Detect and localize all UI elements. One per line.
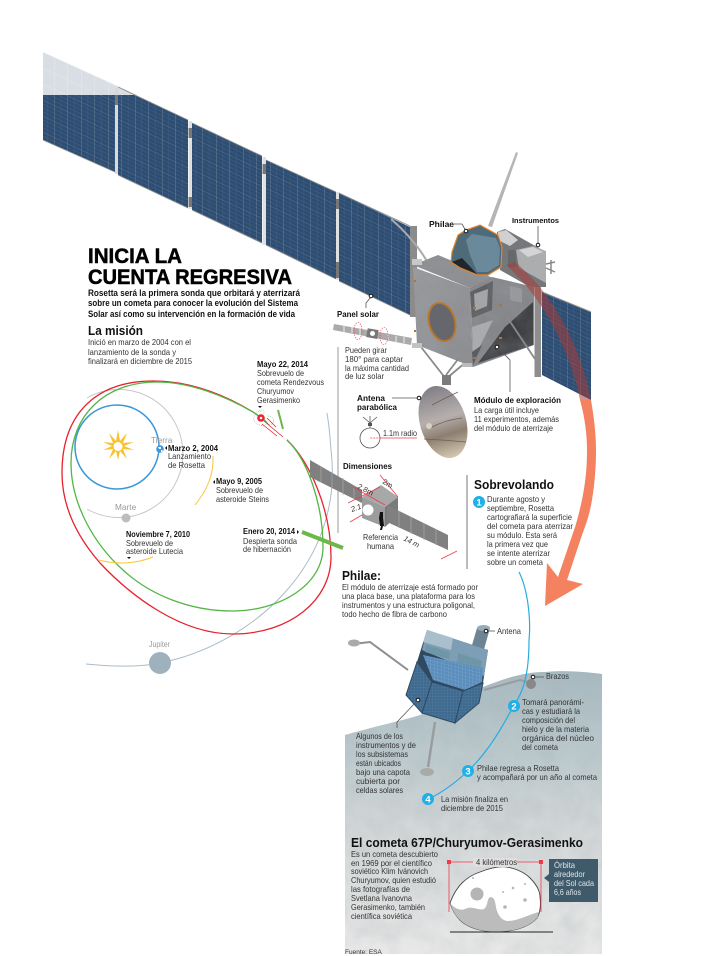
event Marzo 2, 2004: Marzo 2, 2004 (168, 444, 219, 453)
title: CUENTA REGRESIVA (88, 266, 292, 289)
comet section: Churyumov, quien estudió (351, 875, 436, 885)
antenna boom (488, 152, 518, 227)
Sobrevolando text: su módulo. Esta será (487, 530, 557, 540)
subtitle: Solar así como su intervención en la formación de vida (88, 309, 295, 319)
step 2: composición del (522, 715, 575, 725)
La misión: lanzamiento de la sonda y (88, 347, 177, 357)
cube (362, 485, 398, 507)
spacecraft body (412, 152, 555, 385)
lander legs (348, 640, 536, 776)
comet section: Es un cometa descubierto (351, 849, 438, 859)
label: Brazos: Brazos (546, 671, 569, 681)
comet section: Gerasimenko, también (351, 902, 425, 912)
label: Panel solar (333, 294, 412, 381)
event Noviembre 7, 2010 (126, 530, 190, 559)
lander antenna (470, 628, 490, 653)
label: Antena parabólica (357, 393, 421, 448)
label: Antena parabólica: parabólica (357, 402, 397, 412)
Sobrevolando text: se intente aterrizar (487, 548, 550, 558)
dark lower triangle (478, 302, 533, 363)
yellow arc Lutecia (99, 557, 153, 563)
subtitle: sobre un cometa para conocer la evolución del Sistema (88, 298, 298, 308)
Philae text: instrumentos y una estructura poligonal, (342, 600, 475, 610)
trajectory band over panel (506, 262, 591, 400)
event Mayo 9, 2005: Mayo 9, 2005 (216, 477, 263, 486)
orbit callout box: alrededor (554, 869, 585, 879)
label: Panel solar: Pueden girar (345, 345, 387, 355)
label: Antena: Antena (497, 626, 521, 636)
event Enero 20, 2014: Enero 20, 2014 (243, 527, 296, 536)
label: Panel solar: Panel solar (337, 309, 380, 319)
source note: Fuente: ESA (345, 949, 383, 956)
event Mayo 22, 2014: Gerasimenko (257, 395, 300, 405)
lower struts (421, 317, 535, 379)
large solar panel wing (43, 52, 428, 317)
note: instruments (356, 698, 420, 795)
comet shape diagram (447, 857, 553, 932)
comet surface panel (345, 671, 602, 954)
step 3: y acompañará por un año al cometa (477, 772, 597, 782)
subtitle (88, 288, 300, 319)
lander top cells (423, 655, 483, 690)
Mars (122, 514, 130, 522)
measure lines (348, 475, 457, 559)
Philae text (342, 568, 478, 619)
label: Antena parabólica: Antena (357, 393, 385, 403)
step 4: La misión finaliza en (441, 794, 508, 804)
comet section: en 1969 por el científico (351, 858, 432, 868)
porthole ring (424, 300, 460, 344)
event Mayo 22, 2014: cometa Rendezvous (257, 377, 324, 387)
measures: 14 m (402, 534, 421, 550)
label: Instrumentos: Instrumentos (512, 216, 559, 225)
note: instruments: bajo una capota (356, 767, 410, 777)
label: Módulo de exploración (474, 345, 561, 433)
label: Panel solar: la máxima cantidad (345, 363, 409, 373)
step 2: del cometa (522, 742, 558, 752)
lander solar panels (406, 662, 483, 723)
Sobrevolando text: cartografiará la superficie (487, 512, 572, 522)
dimensions diagram: Referencia (363, 532, 398, 542)
label: Panel solar: 180° para captar (345, 354, 403, 364)
divider Sobrevolando (466, 475, 468, 569)
Philae text: El módulo de aterrizaje está formado por (342, 582, 478, 592)
Rosetta orbit red (62, 381, 331, 634)
La misión (88, 323, 192, 366)
event Mayo 22, 2014: Sobrevuelo de (257, 368, 304, 378)
step 4 (422, 793, 508, 813)
Rosetta orbit green (71, 382, 323, 611)
lander top plate (422, 630, 488, 676)
orbit callout box: Órbita (554, 860, 575, 870)
comet section: científica soviética (351, 911, 412, 921)
step 2 (508, 697, 594, 752)
step 2: cas y estudiará la (522, 706, 580, 716)
label: Philae: Philae (429, 219, 454, 229)
dimensions diagram: Dimensiones (343, 461, 392, 471)
subtitle: Rosetta será la primera sonda que orbitará y aterrizará (88, 288, 300, 298)
event Enero 20, 2014: de hibernación (243, 544, 291, 554)
right face (470, 277, 534, 367)
label: Módulo de exploración: Módulo de exploración (474, 395, 561, 405)
right solar panel wing (534, 285, 591, 400)
left face (413, 267, 473, 367)
measures (349, 477, 421, 550)
measures: 2.8m (356, 482, 375, 498)
comet section (351, 835, 583, 921)
label: Módulo de exploración: 11 experimentos, además (474, 414, 559, 424)
blue trajectory line (428, 572, 530, 799)
left wing (310, 460, 362, 503)
Sobrevolando text: septiembre, Rosetta (487, 503, 554, 513)
orbit callout box: del Sol cada (554, 878, 594, 888)
lander body backing (406, 630, 488, 723)
title: INICIA LA (88, 245, 182, 268)
Sobrevolando text: sobre un cometa (487, 557, 543, 567)
parabolic antenna dish (410, 380, 476, 464)
label: Philae (429, 219, 468, 233)
Jupiter (149, 652, 171, 674)
Philae text: todo hecho de fibra de carbono (342, 609, 447, 619)
Sobrevolando text: la primera vez que (487, 539, 548, 549)
comet marker (254, 410, 283, 437)
event Mayo 22, 2014: Mayo 22, 2014 (257, 360, 309, 369)
step 2: orgánica del núcleo (522, 733, 594, 743)
step 2: Tomará panorámi- (522, 697, 584, 707)
note: instruments: los subsistemas (356, 749, 408, 759)
top face (413, 255, 493, 288)
Sobrevolando text (473, 477, 573, 567)
label: Panel solar: de luz solar (345, 371, 384, 381)
Sobrevolando text: Sobrevolando (474, 477, 554, 492)
note: instruments: instrumentos y de (356, 740, 416, 750)
lower left recess (472, 320, 493, 355)
event Mayo 22, 2014 (257, 360, 324, 408)
label: Antena (484, 626, 521, 636)
dimensions diagram (310, 460, 457, 559)
step 4: 4 (425, 794, 431, 806)
small dish diagram (360, 416, 417, 448)
Jupiter orbit (86, 413, 332, 666)
yellow arc Steins (195, 456, 213, 505)
event Enero 20, 2014: Despierta sonda (243, 536, 297, 546)
event Mayo 9, 2005: Sobrevuelo de (216, 485, 263, 495)
event Mayo 9, 2005: asteroide Steins (216, 494, 269, 504)
step 4: diciembre de 2015 (441, 803, 503, 813)
Sobrevolando text: Durante agosto y (487, 494, 546, 504)
label: Antena parabólica: 1.1m radio (383, 428, 417, 438)
dimensions diagram: humana (367, 541, 394, 551)
step 2: hielo y de la materia (522, 724, 589, 734)
label: Módulo de exploración: del módulo de aterrizaje (474, 423, 553, 433)
label: Brazos (531, 671, 569, 681)
comet section: El cometa 67P/Churyumov-Gerasimenko (351, 835, 583, 850)
Philae lander (348, 625, 536, 776)
event Noviembre 7, 2010: Sobrevuelo de (126, 538, 173, 548)
bolts (414, 281, 502, 358)
solar wing support arm (391, 219, 428, 263)
sun (103, 430, 134, 460)
measures: 2.1 (349, 502, 362, 514)
comet section: soviético Klim Ivánovich (351, 866, 428, 876)
label: Instrumentos (512, 216, 559, 247)
comet section: Svetlana Ivanovna (351, 893, 412, 903)
small panel diagram (333, 322, 412, 345)
Mars orbit (87, 390, 183, 518)
trajectory arrow (545, 400, 596, 606)
note: instruments: celdas solares (356, 785, 403, 795)
comet section: las fotografías de (351, 884, 410, 894)
Philae text: una placa base, una plataforma para los (342, 591, 475, 601)
event Enero 20, 2014 (243, 527, 299, 554)
step 3: 3 (465, 766, 471, 778)
note: instruments: cubierta por (356, 776, 400, 786)
Earth orbit (75, 405, 159, 489)
Philae text: Philae: (342, 568, 381, 583)
orbit diagram: Tierra (151, 435, 173, 445)
instruments block (497, 229, 555, 287)
green bar January (302, 532, 343, 548)
event Mayo 22, 2014: Churyumov (257, 386, 295, 396)
step 3: Philae regresa a Rosetta (477, 763, 559, 773)
comet shape diagram: 4 kilómetros (476, 857, 517, 867)
orbit gap at comet (254, 402, 292, 444)
Earth (156, 445, 164, 453)
event Marzo 2, 2004: de Rosetta (168, 460, 205, 470)
event Mayo 9, 2005 (213, 477, 269, 504)
orbit diagram: Jupiter (149, 639, 170, 649)
La misión: La misión (88, 323, 143, 338)
La misión: finalizará en diciembre de 2015 (88, 356, 192, 366)
step 3 (462, 763, 597, 782)
orbit callout box (544, 859, 598, 902)
title (88, 245, 292, 289)
La misión: Inició en marzo de 2004 con el (88, 337, 191, 347)
human figure (379, 512, 384, 530)
event Noviembre 7, 2010: Noviembre 7, 2010 (126, 530, 190, 539)
Philae module outlined (451, 225, 502, 275)
body shading texture (413, 255, 534, 367)
green mark 22 May (278, 410, 283, 429)
event Noviembre 7, 2010: asteroide Lutecia (126, 546, 183, 556)
intro divider (337, 347, 339, 533)
measures: 2m (381, 477, 395, 490)
step 2: 2 (511, 702, 517, 712)
right wing (387, 505, 448, 550)
orbit diagram: Marte (115, 502, 137, 512)
note: instruments: Algunos de los (356, 731, 403, 741)
note: instruments: están ubicados (356, 758, 401, 768)
label: Módulo de exploración: La carga útil incluye (474, 405, 539, 415)
orbit diagram (62, 360, 343, 674)
orbit callout box: 6,6 años (554, 887, 581, 897)
step 1: 1 (476, 498, 482, 508)
Sobrevolando text: del cometa para aterrizar (487, 521, 573, 531)
event Marzo 2, 2004 (165, 444, 219, 470)
event Marzo 2, 2004: Lanzamiento (168, 451, 211, 461)
upper right panel recess (470, 281, 493, 318)
